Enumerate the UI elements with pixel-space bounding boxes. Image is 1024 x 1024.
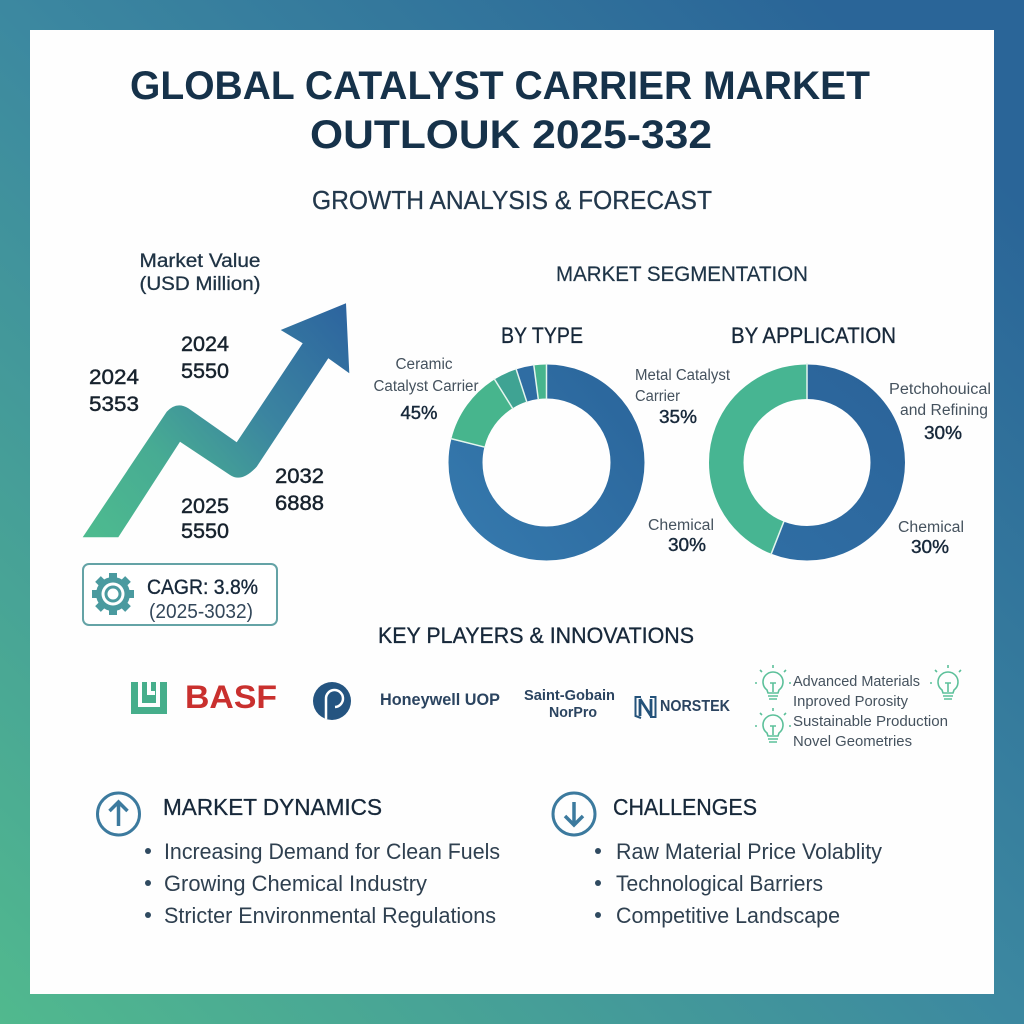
logo: Norstek: [636, 697, 731, 718]
label: petrochemical and refining: Petchohouical: [889, 381, 991, 398]
innovation text: Sustainable Production: [793, 713, 948, 730]
data labels: [89, 333, 324, 543]
title: GLOBAL CATALYST CARRIER MARKET: [130, 64, 870, 108]
logo: circle P: [313, 682, 351, 720]
innovation list: [755, 665, 961, 750]
heading: by type: BY TYPE: [501, 323, 583, 348]
dynamics bullets: Stricter Environmental Regulations: [164, 903, 496, 928]
panel: market value chart: [83, 251, 349, 625]
label: petrochemical and refining: and Refining: [900, 402, 988, 419]
icon: light bulb 3: [755, 708, 791, 742]
icon: light bulb 1: [755, 665, 791, 699]
data labels: 2024: [181, 333, 229, 356]
label: ceramic catalyst carrier: Catalyst Carrier: [374, 378, 478, 395]
label: metal catalyst carrier: 35%: [659, 407, 697, 427]
icon: up arrow: [98, 793, 140, 835]
logo: Saint-Gobain NorPro: Saint-Gobain: [524, 687, 615, 704]
label: chemical right donut: Chemical: [898, 519, 964, 536]
label: chemical left donut: 30%: [668, 535, 706, 555]
CAGR callout: [83, 564, 277, 625]
panel: key players and innovations: [131, 623, 961, 750]
innovation text: Novel Geometries: [793, 733, 912, 750]
label: ceramic catalyst carrier: 45%: [400, 403, 438, 423]
icon: light bulb 2: [930, 665, 961, 699]
label: metal catalyst carrier: [635, 367, 731, 427]
dynamics bullets: Increasing Demand for Clean Fuels: [164, 839, 500, 864]
label: chemical right donut: 30%: [911, 537, 949, 557]
innovation text: [793, 673, 948, 750]
label: chemical left donut: Chemical: [648, 517, 714, 534]
panel: challenges: [553, 793, 882, 928]
label: chemical left donut: [648, 517, 714, 555]
label: chemical right donut: [898, 519, 964, 557]
section heading: KEY PLAYERS & INNOVATIONS: [378, 623, 694, 648]
logo: Saint-Gobain NorPro: NorPro: [549, 704, 597, 721]
chart heading: [140, 251, 260, 295]
label: ceramic catalyst carrier: Ceramic: [396, 356, 453, 373]
logo: Honeywell UOP: Honeywell UOP: [380, 691, 500, 709]
innovation text: Inproved Porosity: [793, 693, 908, 710]
subtitle: GROWTH ANALYSIS & FORECAST: [312, 185, 712, 215]
logo: BASF: BASF: [185, 679, 277, 715]
label: ceramic catalyst carrier: [374, 356, 478, 423]
title: [130, 64, 870, 157]
data labels: 5353: [89, 393, 139, 416]
label: petrochemical and refining: 30%: [924, 423, 962, 443]
data labels: 5550: [181, 520, 229, 543]
dynamics bullets: Growing Chemical Industry: [164, 871, 427, 896]
heading: by application: BY APPLICATION: [731, 323, 896, 348]
CAGR callout: (2025-3032): [149, 601, 253, 623]
data labels: 2032: [275, 465, 324, 488]
icon: down arrow: [553, 793, 595, 835]
data labels: 2025: [181, 495, 229, 518]
innovation text: Advanced Materials: [793, 673, 920, 690]
label: petrochemical and refining: [889, 381, 991, 443]
growth arrow: [83, 303, 349, 537]
CAGR text: CAGR: 3.8%: [147, 576, 258, 599]
logo: BASF mark: [131, 682, 167, 714]
challenges bullets: Competitive Landscape: [616, 903, 840, 928]
panel: market dynamics: [98, 793, 500, 928]
donut chart: by type: [435, 351, 658, 574]
data labels: 2024: [89, 366, 139, 389]
panel: market segmentation: [374, 263, 991, 574]
data labels: 5550: [181, 360, 229, 383]
logo: Norstek: NORSTEK: [660, 698, 731, 715]
challenges bullets: Raw Material Price Volablity: [616, 839, 882, 864]
chart heading: (USD Million): [140, 274, 260, 295]
dynamics bullets: [145, 839, 500, 928]
donut chart: by application: [702, 358, 912, 567]
challenges bullets: Technological Barriers: [616, 871, 823, 896]
logo: Saint-Gobain NorPro: [524, 687, 615, 721]
data labels: 6888: [275, 492, 324, 515]
title: OUTLOUK 2025-332: [310, 113, 712, 157]
icon: gear: [92, 573, 134, 615]
label: metal catalyst carrier: Metal Catalyst: [635, 367, 731, 384]
challenges bullets: [595, 839, 882, 928]
label: metal catalyst carrier: Carrier: [635, 388, 680, 405]
chart heading: Market Value: [140, 251, 260, 272]
segmentation heading: MARKET SEGMENTATION: [556, 263, 808, 286]
challenges heading: CHALLENGES: [613, 794, 757, 820]
dynamics heading: MARKET DYNAMICS: [163, 794, 382, 820]
